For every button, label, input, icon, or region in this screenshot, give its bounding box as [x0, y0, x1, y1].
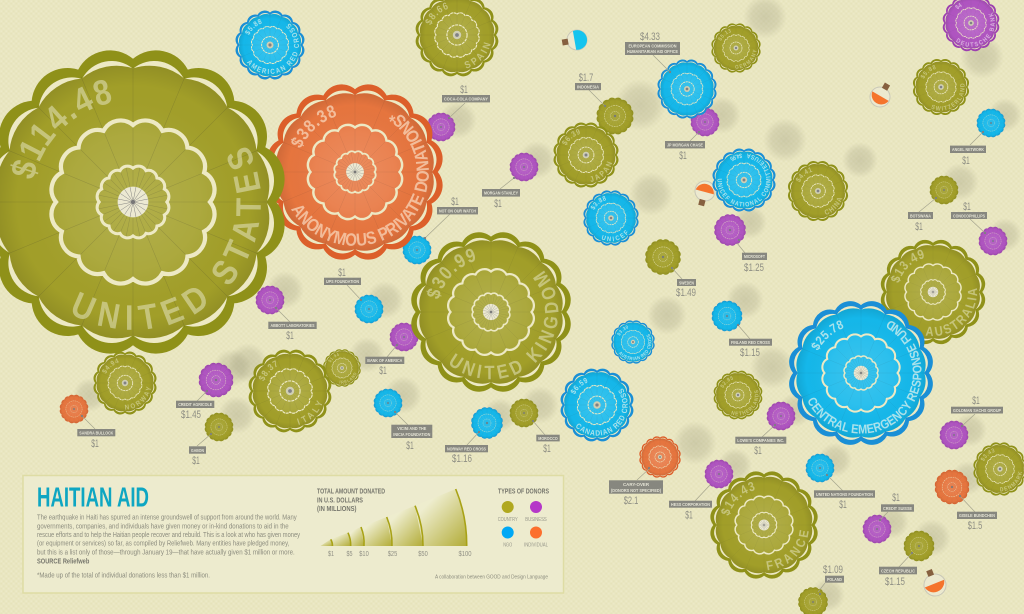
label: Finland Red Cross: $1.15 — [740, 347, 760, 359]
flower: United Kingdom — [411, 232, 571, 392]
label: United Nations Foundation — [814, 474, 875, 511]
label: Vicini and the Inicia Foundation — [391, 411, 432, 452]
flower: Germany — [711, 23, 761, 73]
label: Vicini and the Inicia Foundation: $1 — [406, 440, 414, 452]
intro text: *Made up of the total of individual donations less than $1 million. — [37, 572, 210, 579]
flower: Japan: $6.39 — [562, 129, 580, 145]
label: Not On Our Watch: $1 — [451, 196, 459, 208]
flower: UNICEF: UNICEF — [602, 230, 628, 242]
flower: European Commission Humanitarian Aid Office — [657, 59, 717, 119]
flower: Austrian Red Cross — [611, 320, 655, 364]
label: Hess Corporation: $1 — [685, 510, 693, 522]
flower: Vicini and the Inicia Foundation — [374, 389, 402, 417]
intro text: SOURCE Reliefweb — [37, 558, 89, 565]
legend: types of donors: INDIVIDUAL — [524, 542, 548, 548]
label: Coca-Cola Company: $1 — [460, 84, 468, 96]
label: Microsoft — [737, 239, 767, 274]
flower: Austrian Red Cross: $3.30 — [617, 325, 628, 336]
label: Morgan Stanley: MORGAN STANLEY — [484, 191, 519, 196]
flower: Switzerland: SWITZERLAND — [931, 84, 965, 111]
label: Norway Red Cross: NORWAY RED CROSS — [447, 446, 486, 452]
flower: Netherlands: $2.85 — [720, 376, 733, 388]
label: Lowe's Companies Inc. — [735, 424, 786, 457]
label: Angel Network: ANGEL NETWORK — [952, 147, 984, 152]
flower: China — [788, 161, 848, 221]
label: Gisele Bundchen: $1.5 — [968, 520, 982, 532]
label: Microsoft: $1.25 — [744, 262, 764, 274]
label: Sandra Bullock — [77, 415, 115, 450]
flower: Morocco — [510, 399, 538, 427]
label: Carry-over (donors not specified) — [609, 467, 663, 507]
flower: Anonymous Private Donations: ANONYMOUS PRIVATE DONATIONS* — [269, 102, 462, 279]
label: Hess Corporation — [669, 485, 712, 522]
flower: Netherlands — [714, 370, 762, 420]
label: Angel Network — [950, 131, 986, 167]
flower: UNICEF National Committee/USA: UNICEF NATIONAL COMMITTEE/USA — [717, 154, 771, 206]
flower: Norway — [94, 352, 156, 414]
label: ConocoPhillips — [951, 201, 987, 234]
scale chart: amount wedges: $50 — [418, 549, 428, 558]
flower: Carry-over — [639, 436, 681, 478]
label: Not On Our Watch — [424, 196, 478, 239]
label: Gisele Bundchen — [957, 495, 997, 532]
label: Gabon: GABON — [191, 448, 204, 453]
label: Credit Agricole: $1.45 — [181, 409, 201, 421]
label: Morgan Stanley: $1 — [494, 198, 502, 210]
flower: Gisele Bundchen — [935, 470, 969, 504]
scale chart: amount wedges: $5 — [346, 549, 352, 558]
flower: Australia — [880, 240, 986, 344]
label: Coca-Cola Company: COCA-COLA COMPANY — [444, 97, 489, 102]
intro text — [37, 515, 300, 579]
label: Credit Agricole — [176, 390, 214, 421]
flower: Deutsche Bank: DEUTSCHE BANK — [956, 12, 995, 47]
flower: Australia: AUSTRALIA — [926, 288, 978, 336]
flower: China: CHINA — [824, 198, 842, 214]
flower: UNICEF: $3.88 — [590, 196, 606, 210]
flower: United Kingdom: UNITED KINGDOM — [450, 270, 558, 380]
flower: Germany: GERMANY — [735, 50, 756, 69]
label: Abbott Laboratories: $1 — [286, 330, 294, 342]
label: Norway Red Cross — [445, 431, 488, 465]
flower: Deutsche Bank: $4 — [955, 2, 962, 10]
flower: Goldman Sachs Group — [940, 421, 968, 449]
intro text: The earthquake in Haiti has spurred an intense groundswell of support from around the world. Many — [37, 515, 297, 522]
label: Hess Corporation: HESS CORPORATION — [671, 502, 710, 507]
label: Credit Agricole: CREDIT AGRICOLE — [178, 402, 212, 407]
flower: Denmark — [973, 442, 1024, 496]
flower: Central Emergency Response Fund: CENTRAL EMERGENCY RESPONSE FUND — [808, 321, 922, 434]
chart heading: IN U.S. DOLLARS — [317, 496, 363, 504]
flower: Credit Agricole — [199, 363, 233, 397]
label: UPS Foundation: $1 — [338, 267, 346, 279]
legend: types of donors: NGO — [503, 542, 512, 548]
label: Botswana — [908, 197, 937, 233]
flower: Spain: $8.66 — [425, 2, 448, 25]
icon: orange flask bottom right — [919, 566, 949, 599]
label: Morgan Stanley — [482, 177, 520, 210]
flower: ConocoPhillips — [979, 227, 1007, 255]
label: Sweden: SWEDEN — [679, 280, 694, 285]
flower: Gabon — [205, 413, 233, 441]
intro text: governments, companies, and individuals have given money or in-kind donations to aid in the — [37, 523, 289, 530]
flower: Credit Suisse — [863, 515, 891, 543]
flower: United Kingdom: $30.99 — [426, 248, 475, 299]
label: Abbott Laboratories — [268, 307, 317, 342]
flower: China: $4.41 — [796, 167, 812, 182]
flower: Deutsche Bank — [942, 0, 1000, 52]
flower: Abbott Laboratories — [256, 286, 284, 314]
label: Lowe's Companies Inc.: LOWE'S COMPANIES INC. — [737, 438, 784, 443]
label: United Nations Foundation: $1 — [839, 499, 847, 511]
flower: JP Morgan Chase — [691, 108, 719, 136]
label: Credit Suisse — [879, 492, 914, 521]
label: Sweden — [671, 267, 696, 299]
flower: Angel Network — [977, 109, 1005, 137]
flower: Norway: NORWAY — [124, 386, 151, 410]
flower: Sweden — [645, 239, 681, 275]
flower: Spain — [416, 0, 498, 76]
flower: Austrian Red Cross: AUSTRIAN RED CROSS — [618, 334, 652, 360]
flower: United States: UNITED STATES — [61, 98, 310, 389]
label: Botswana: BOTSWANA — [910, 213, 931, 218]
flower: Canadian Red Cross: $6.59 — [570, 378, 588, 394]
label: European Commission Humanitarian Aid Office: $4.33 — [640, 31, 660, 43]
flower: Central Emergency Response Fund: $25.78 — [811, 320, 844, 350]
flower: small country beside Italy — [323, 349, 361, 387]
label: Morocco: MOROCCO — [538, 436, 558, 441]
label: Vicini and the Inicia Foundation: INICIA FOUNDATION — [393, 432, 431, 437]
flower: Botswana — [930, 176, 958, 204]
label: Norway Red Cross: $1.16 — [452, 453, 472, 465]
label: Credit Suisse: $1 — [892, 492, 900, 504]
flower: Hess Corporation — [705, 460, 733, 488]
label: Goldman Sachs Group — [951, 395, 1003, 427]
flower: UNICEF — [583, 190, 639, 246]
label: Gabon: $1 — [192, 455, 200, 467]
flower: France: FRANCE — [766, 530, 809, 570]
flower: Australia: $13.49 — [890, 250, 924, 282]
label: Indonesia: $1.7 — [579, 72, 593, 84]
label: Czech Republic: $1.15 — [885, 576, 905, 588]
icon: orange flask — [866, 79, 896, 111]
flower: Finland Red Cross — [712, 301, 742, 331]
label: Bank of America: BANK OF AMERICA — [367, 358, 403, 363]
flower: Indonesia — [597, 98, 633, 134]
label: European Commission Humanitarian Aid Office: HUMANITARIAN AID OFFICE — [627, 49, 678, 54]
label: Czech Republic — [879, 552, 917, 588]
flower: Japan: JAPAN — [590, 162, 612, 182]
label: Abbott Laboratories: ABBOTT LABORATORIES — [270, 323, 314, 328]
flower: Norway Red Cross — [471, 407, 503, 439]
flower: Anonymous Private Donations: $38.38 — [286, 90, 345, 159]
label: Sweden: $1.49 — [676, 287, 696, 299]
flower: Switzerland — [912, 59, 970, 115]
intro text: but this is a list only of those—through January 19—that have actually given $1 million or more. — [37, 549, 295, 556]
label: Morocco: $1 — [543, 443, 551, 455]
label: Carry-over (donors not specified): (DONORS NOT SPECIFIED) — [611, 488, 661, 493]
flower: Denmark: DENMARK — [1000, 472, 1022, 492]
flower: Poland — [798, 587, 828, 614]
label: Indonesia — [575, 72, 606, 107]
label: JP Morgan Chase: $1 — [679, 150, 687, 162]
flower: UPS Foundation — [355, 295, 383, 323]
flower: Italy — [248, 350, 332, 432]
label: Gabon — [189, 433, 212, 467]
label: European Commission Humanitarian Aid Office — [625, 31, 680, 73]
label: JP Morgan Chase — [665, 131, 705, 162]
flower: Denmark: $3.43 — [980, 448, 994, 461]
intro text: rescue efforts and to help the Haitian people recover and rebuild. This is a look at who has given money — [37, 532, 300, 539]
flower: Morgan Stanley — [510, 153, 538, 181]
scale chart: amount wedges: $1 — [328, 549, 334, 558]
label: Poland — [818, 564, 844, 595]
intro text: (or equipment or services) so far, as compiled by Reliefweb. Many entities have pledged money, — [37, 541, 289, 548]
flower: Bank of America — [390, 323, 418, 351]
flower: United States: $114.48 — [2, 54, 125, 196]
flower: United Nations Foundation — [806, 454, 834, 482]
flower: American Red Cross: $5.88 — [245, 19, 262, 35]
label: Finland Red Cross: FINLAND RED CROSS — [731, 340, 770, 345]
flower: Switzerland: $5.88 — [920, 65, 936, 78]
label: ConocoPhillips: $1 — [963, 201, 971, 213]
label: JP Morgan Chase: JP MORGAN CHASE — [667, 143, 703, 148]
flower: Anonymous Private Donations — [270, 84, 443, 260]
flower: Netherlands: NETHERLANDS — [731, 390, 758, 416]
label: Poland: $1.09 — [823, 564, 843, 576]
flower: small country beside Italy: $1.94 — [328, 352, 339, 362]
label: Indonesia: INDONESIA — [577, 84, 600, 90]
flower: United States — [0, 50, 285, 354]
flower: Norway: $4.94 — [102, 358, 119, 374]
scale chart: amount wedges: $10 — [359, 549, 369, 558]
flower: Microsoft — [714, 214, 746, 246]
flower: American Red Cross — [236, 10, 304, 80]
flower: Italy: $8.37 — [258, 360, 277, 381]
flower: Czech Republic — [904, 531, 934, 561]
flower: Coca-Cola Company — [427, 113, 455, 141]
label: Goldman Sachs Group: $1 — [972, 395, 980, 407]
flower: Japan — [554, 122, 618, 188]
flower: France — [710, 471, 818, 579]
label: Not On Our Watch: NOT ON OUR WATCH — [439, 209, 476, 214]
label: Czech Republic: CZECH REPUBLIC — [881, 568, 915, 573]
label: Sandra Bullock: $1 — [91, 438, 99, 450]
credit line: A collaboration between GOOD and Design Language — [435, 574, 548, 580]
label: Vicini and the Inicia Foundation: VICINI AND THE — [397, 426, 426, 431]
flower: small country beside Italy: IRELAND — [340, 372, 356, 384]
label: Credit Suisse: CREDIT SUISSE — [883, 506, 912, 511]
label: Microsoft: MICROSOFT — [744, 254, 765, 259]
legend: types of donors: COUNTRY — [498, 517, 518, 523]
flower: Germany: $5.13 — [718, 28, 731, 40]
label: Coca-Cola Company — [442, 84, 490, 119]
flower: Sandra Bullock — [60, 395, 88, 423]
label: Morocco — [532, 420, 560, 455]
label: Carry-over (donors not specified): $2.1 — [624, 495, 638, 507]
label: Poland: POLAND — [827, 577, 842, 582]
flower: UNICEF National Committee/USA: $4.95 — [730, 153, 742, 162]
label: Sandra Bullock: SANDRA BULLOCK — [79, 430, 114, 436]
icon: orange flask by UNICEF — [691, 179, 717, 208]
label: Finland Red Cross — [729, 324, 772, 359]
legend: types of donors — [498, 487, 549, 548]
flower: Italy: ITALY — [297, 400, 322, 425]
label: Gisele Bundchen: GISELE BUNDCHEN — [959, 513, 995, 518]
scale chart: amount wedges — [320, 489, 472, 558]
chart heading: TOTAL AMOUNT DONATED — [317, 487, 385, 496]
label: Lowe's Companies Inc.: $1 — [754, 445, 762, 457]
label: Angel Network: $1 — [962, 155, 970, 167]
title: HAITIAN AID — [37, 482, 149, 512]
flower: France: $14.43 — [720, 482, 755, 516]
flower: Lowe's Companies — [767, 402, 795, 430]
label: UPS Foundation: UPS FOUNDATION — [326, 279, 359, 284]
chart heading — [317, 487, 385, 513]
flower: Canadian Red Cross: CANADIAN RED CROSS — [576, 388, 628, 436]
label: Goldman Sachs Group: GOLDMAN SACHS GROUP — [953, 408, 1001, 413]
icon: blue flask — [560, 28, 589, 52]
label: United Nations Foundation: UNITED NATIONS FOUNDATION — [816, 492, 873, 497]
scale chart: amount wedges: $25 — [388, 549, 397, 558]
flower: American Red Cross: AMERICAN RED CROSS — [246, 24, 300, 74]
chart heading: (IN MILLIONS) — [317, 504, 357, 513]
scale chart: amount wedges: $100 — [458, 549, 472, 558]
label: Botswana: $1 — [915, 221, 923, 233]
legend: types of donors: BUSINESS — [525, 517, 547, 523]
label: ConocoPhillips: CONOCOPHILLIPS — [953, 213, 985, 218]
label: Carry-over (donors not specified): CARY-OVER — [623, 482, 650, 487]
flower: Not On Our Watch — [403, 236, 431, 264]
label: Bank of America — [365, 344, 404, 377]
panel: legend and intro — [23, 476, 564, 593]
label: Bank of America: $1 — [379, 365, 387, 377]
label: UPS Foundation — [324, 267, 362, 301]
legend: types of donors: TYPES OF DONORS — [498, 487, 549, 496]
flower: Canadian Red Cross — [560, 368, 634, 442]
flower: Spain: SPAIN — [464, 42, 490, 68]
label: European Commission Humanitarian Aid Office: EUROPEAN COMMISSION — [628, 43, 677, 48]
